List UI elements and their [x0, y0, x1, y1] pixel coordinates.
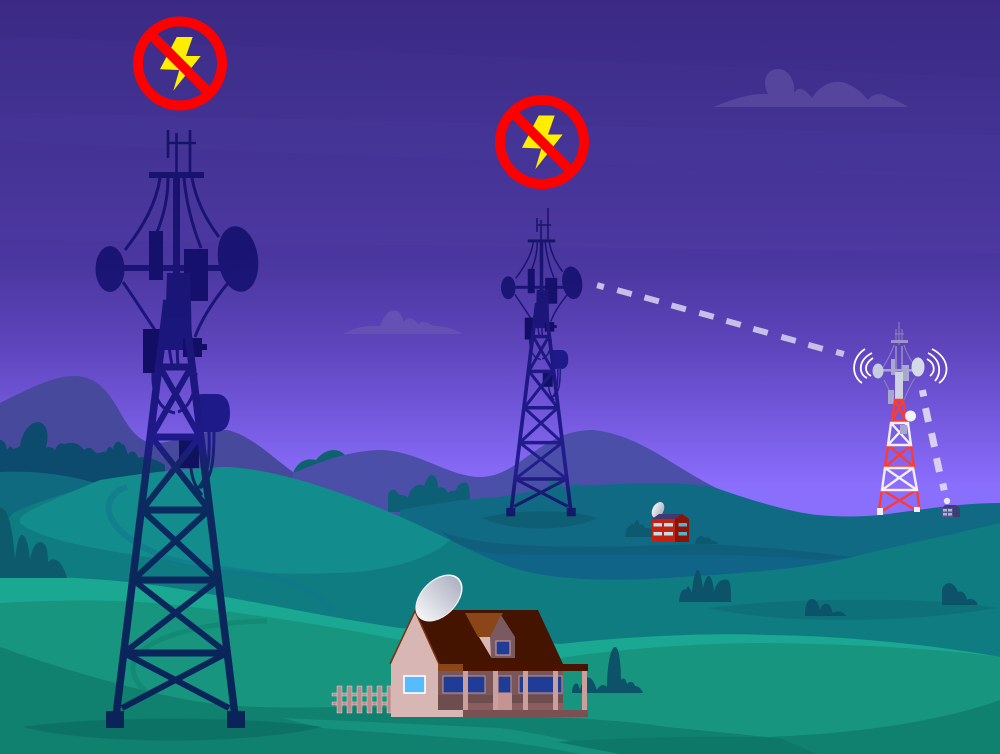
gable wall — [391, 612, 439, 717]
ground: lower right dark — [0, 647, 1000, 754]
gable trim — [390, 611, 439, 664]
bush: far red house right — [695, 536, 718, 544]
porch windows — [443, 676, 485, 693]
gable window — [404, 676, 425, 693]
dashed link between towers — [596, 282, 845, 357]
lower mid lake band — [400, 540, 853, 590]
dashed link to small building — [919, 389, 948, 491]
swirl track on hill — [109, 487, 333, 613]
ridge line — [440, 530, 853, 560]
porch floor — [463, 710, 588, 717]
ground: bright front strip — [0, 577, 1000, 754]
building: distant grey house — [942, 498, 960, 517]
shadow: second tower — [482, 511, 597, 528]
tower: big foreground, disabled — [96, 130, 262, 728]
no-power sign: left — [138, 22, 222, 106]
door — [497, 693, 512, 710]
second tower top antennas — [537, 208, 551, 241]
eave — [438, 664, 463, 671]
porch wall — [438, 670, 563, 710]
house — [390, 565, 588, 717]
ground: mid teal — [0, 467, 1000, 700]
porch posts — [463, 671, 587, 711]
tower: small relay, transmitting — [854, 322, 947, 515]
building: small red house — [649, 500, 689, 542]
big tower top antennas — [168, 130, 196, 172]
dormer roof patch — [465, 613, 503, 637]
ground: mid back — [400, 483, 1000, 680]
small tower lattice — [879, 400, 920, 511]
bush: far red house left — [625, 520, 652, 537]
leaf bush on ridge — [293, 450, 345, 480]
signal waves — [854, 349, 947, 383]
bushes: behind second tower hill — [388, 475, 470, 512]
ground: back left teal — [0, 472, 120, 540]
dormer — [490, 615, 515, 658]
wall base — [439, 710, 463, 717]
mountain: back left — [0, 376, 293, 540]
bush: teal at second tower — [546, 478, 583, 496]
ground: lower light band — [283, 718, 620, 754]
bushes: left foreground — [0, 508, 67, 578]
shadow: bottom — [557, 737, 817, 754]
ground shadow lens: right — [708, 600, 997, 620]
ground: front main — [0, 601, 1000, 754]
hill: back purple — [293, 430, 720, 540]
bushes: far left — [0, 422, 165, 484]
bush: behind house — [572, 647, 643, 693]
cloud: upper right — [714, 69, 908, 107]
roof — [415, 610, 563, 664]
small tower antennas and mast — [878, 322, 918, 400]
swirl track on front — [133, 621, 267, 712]
no-power sign: center — [500, 100, 584, 184]
cloud: middle — [344, 311, 463, 334]
tower: second, disabled — [501, 208, 584, 516]
bush: right edge — [942, 583, 978, 605]
satellite dish — [406, 565, 472, 631]
sky bands — [0, 36, 1000, 253]
bush: center right — [679, 570, 731, 602]
fence — [332, 686, 391, 713]
shadow: big tower — [23, 719, 322, 740]
bush: right small — [805, 599, 846, 616]
hill: big left lighter — [19, 467, 450, 574]
